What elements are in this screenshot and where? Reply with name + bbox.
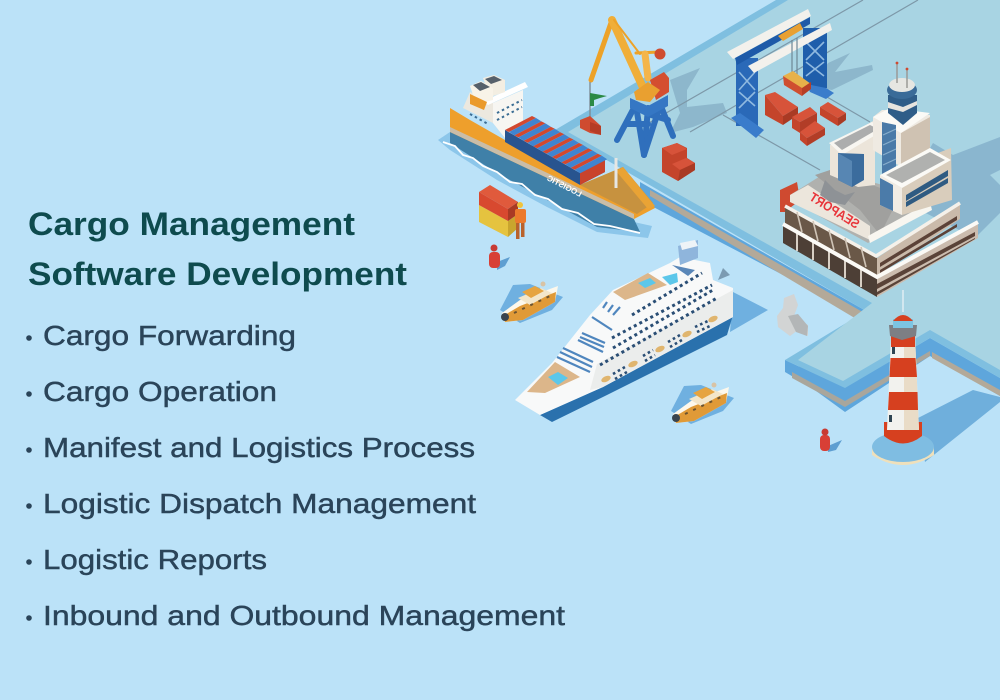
mast: [902, 290, 904, 312]
orange hull: [450, 108, 655, 219]
red side container: [780, 182, 800, 212]
lantern gallery: [889, 325, 917, 340]
gantry crane: [727, 9, 834, 138]
suspended load: [791, 40, 793, 75]
cruise shadow: [730, 292, 768, 332]
crane house: [650, 72, 669, 100]
upper deck: [613, 273, 667, 300]
quay surface: [568, 0, 1000, 381]
shipping containers and worker: [479, 185, 526, 239]
forward pool: [548, 372, 568, 385]
rear crossbeam: [735, 17, 810, 65]
item 6: Inbound and Outbound Management: [43, 600, 565, 631]
stern flag: [718, 268, 730, 280]
counterweight: [654, 48, 666, 60]
title: [28, 206, 407, 292]
left wing: [830, 120, 875, 187]
superstructure: [463, 90, 523, 138]
gantry trolley: [778, 23, 803, 41]
quay side wall: [640, 182, 1000, 412]
upper base right: [877, 203, 960, 276]
base rims: [783, 222, 978, 277]
gantry rear legs: [803, 28, 827, 88]
tugboat one: [500, 282, 563, 323]
roof deck: [790, 170, 930, 243]
right wing: [880, 148, 952, 215]
funnel: [678, 240, 698, 265]
hull name: LOGISTIC: [545, 174, 583, 199]
title: Cargo Management: [28, 206, 355, 242]
crane base legs: [617, 104, 673, 155]
tan wall strip: [650, 190, 866, 320]
red bands: [890, 358, 917, 377]
bullet 3: [26, 447, 32, 453]
dark hull: [450, 130, 640, 232]
lower wall strip: [792, 351, 930, 407]
item 3: Manifest and Logistics Process: [43, 432, 475, 463]
item 2: Cargo Operation: [43, 376, 277, 407]
panel: quay platform: [555, 0, 1000, 412]
gantry beams: [727, 9, 811, 59]
lifeboats: [600, 314, 719, 384]
buoy one: [489, 244, 510, 270]
anchor sculpture: [820, 180, 855, 205]
anchor statue: [777, 294, 808, 336]
lighthouse shadow: [918, 390, 1000, 462]
upper pillars: [797, 212, 866, 267]
tower block: [873, 110, 930, 166]
upper base front: [785, 206, 877, 276]
portal crane: [580, 20, 673, 155]
windows: [892, 347, 895, 354]
buoy two: [820, 428, 842, 452]
wake: [438, 132, 652, 238]
gantry bracing: [739, 42, 824, 108]
deck stripes: [557, 302, 620, 372]
crane jib: [591, 20, 660, 94]
lighthouse: [872, 290, 1000, 465]
green flag: [590, 93, 607, 106]
bullet 1: [26, 335, 32, 341]
bullet 6: [26, 615, 32, 621]
blue hull: [540, 315, 733, 422]
item 4: Logistic Dispatch Management: [43, 488, 476, 519]
cruise ship: [515, 240, 768, 422]
suspended container: [580, 116, 601, 135]
sign slab: [790, 185, 870, 240]
red plinth: [884, 422, 922, 444]
tower: [887, 335, 919, 430]
antennas: [896, 63, 898, 83]
container stack on quay: [662, 143, 695, 181]
item 1: Cargo Forwarding: [43, 320, 296, 351]
container deck: [505, 116, 607, 185]
bullet 2: [26, 391, 32, 397]
quay rim: [555, 0, 1000, 388]
gantry shadow: [813, 53, 873, 90]
white foam line: [443, 142, 640, 233]
side shading: [590, 290, 733, 390]
ship mast: [614, 158, 618, 188]
sign text: SEAPORT: [807, 189, 862, 232]
hoist wire: [589, 82, 591, 118]
ship body: [515, 257, 733, 415]
lower base right: [877, 222, 978, 297]
quay rail lines: [640, 0, 918, 170]
cargo ship: [438, 75, 655, 238]
control tower: [888, 95, 917, 125]
gantry front legs: [736, 58, 758, 126]
dome: [893, 315, 913, 321]
rock base: [872, 447, 934, 465]
feature list: [26, 320, 565, 631]
bullet 4: [26, 503, 32, 509]
bullet 5: [26, 559, 32, 565]
terminal building: [780, 62, 978, 297]
worker: [515, 202, 526, 239]
window clusters: [613, 320, 710, 379]
red containers under gantry: [765, 92, 846, 146]
lower pillars: [797, 232, 861, 287]
right wall strip: [932, 352, 1000, 396]
superstructure windows: [470, 100, 522, 124]
item 5: Logistic Reports: [43, 544, 267, 575]
foredeck: [580, 167, 653, 214]
tugboat two: [671, 382, 734, 424]
lower base front: [783, 224, 877, 297]
window rows: [600, 273, 717, 365]
crane shadow: [670, 68, 727, 133]
foredeck: [527, 362, 580, 393]
title: Software Development: [28, 256, 407, 292]
building shadow: [900, 137, 1000, 238]
